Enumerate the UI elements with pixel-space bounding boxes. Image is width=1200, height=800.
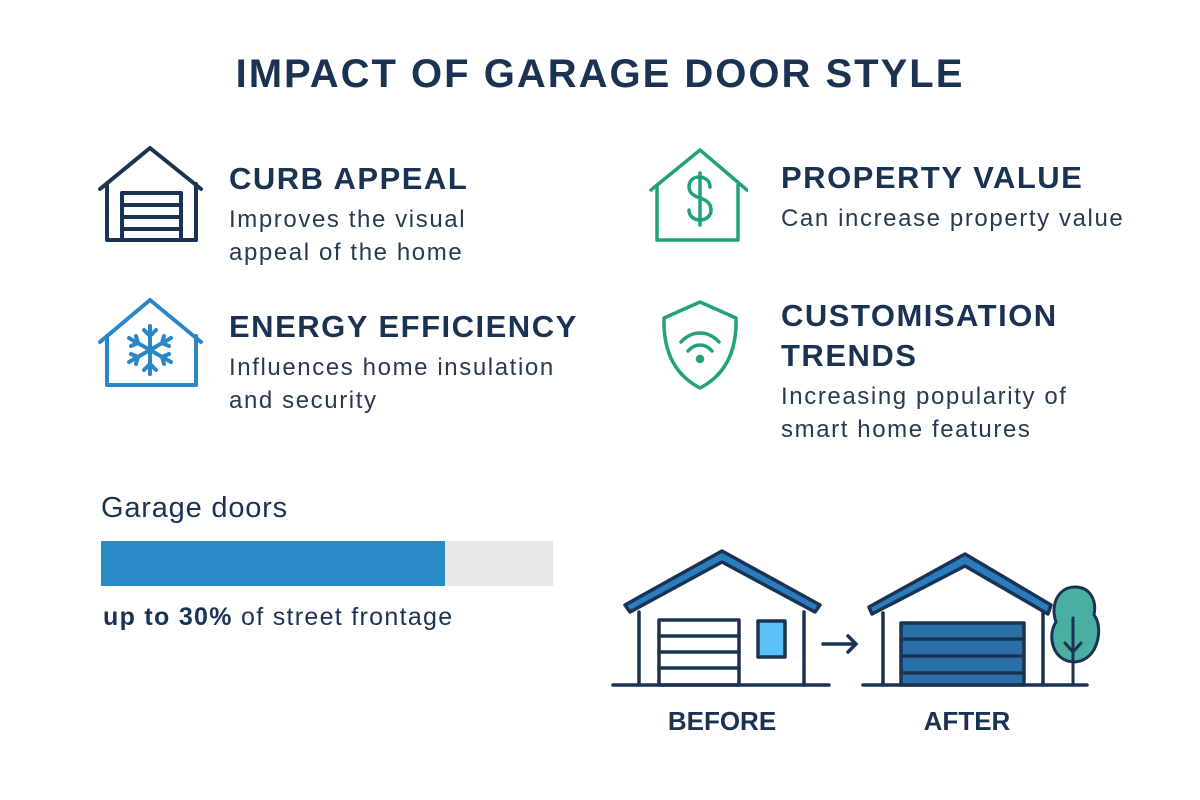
panel: customisation trends — [662, 298, 1068, 443]
label: after: AFTER — [924, 706, 1011, 736]
illustration: before and after — [611, 549, 1100, 736]
text: Improves the visual — [229, 206, 466, 233]
text — [229, 206, 466, 266]
text: Can increase property value — [781, 205, 1124, 232]
text: Influences home insulation — [229, 354, 555, 381]
text: and security — [229, 387, 378, 414]
heading: CURB APPEAL — [229, 161, 468, 196]
label: before: BEFORE — [668, 706, 776, 736]
stat: garage doors bar — [101, 492, 553, 631]
text: appeal of the home — [229, 239, 463, 266]
heading: PROPERTY VALUE — [781, 160, 1083, 195]
heading: TRENDS — [781, 338, 917, 373]
panel: property value — [649, 148, 1124, 242]
heading: CUSTOMISATION — [781, 298, 1058, 333]
text: Increasing popularity of — [781, 383, 1068, 410]
panel: energy efficiency — [98, 298, 578, 414]
icon: wifi shield — [662, 300, 738, 390]
house: before — [613, 551, 829, 685]
bar chart — [101, 541, 553, 586]
text — [781, 383, 1068, 443]
arrow — [823, 636, 856, 652]
icon: dollar house — [649, 148, 748, 242]
icon: snowflake house — [98, 298, 204, 387]
panel: curb appeal — [98, 146, 468, 266]
title: IMPACT OF GARAGE DOOR STYLE — [236, 52, 964, 96]
text: smart home features — [781, 416, 1032, 443]
heading: ENERGY EFFICIENCY — [229, 309, 578, 344]
icon: tree — [1052, 587, 1099, 685]
label: Garage doors — [101, 492, 288, 524]
text — [229, 354, 555, 414]
caption: up to 30% of street frontage — [103, 603, 453, 631]
house: after — [863, 554, 1087, 685]
icon: garage house — [98, 146, 204, 242]
heading — [781, 298, 1058, 373]
